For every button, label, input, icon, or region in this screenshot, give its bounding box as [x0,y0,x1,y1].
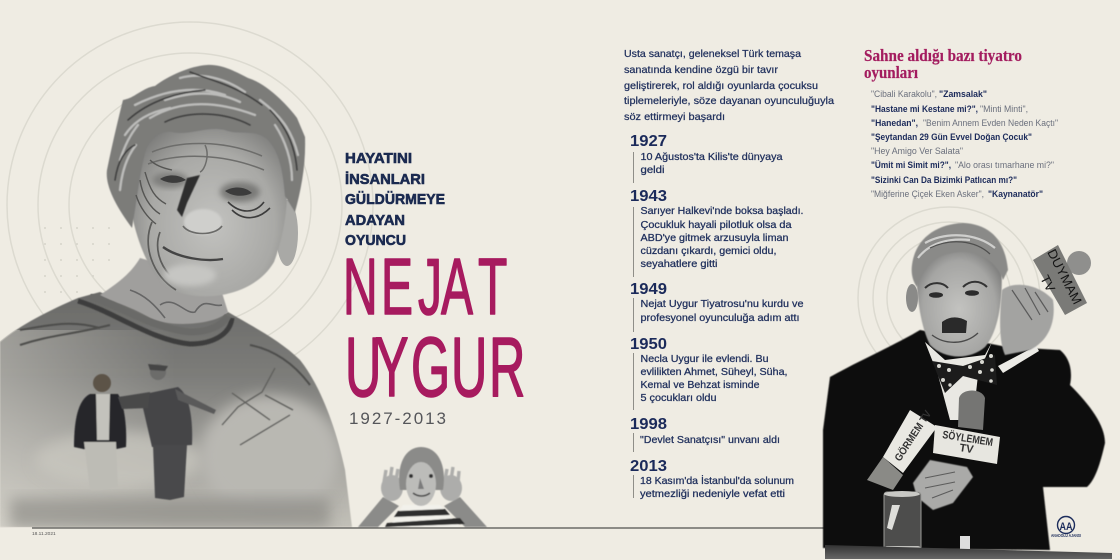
dot grid behind left portrait [44,227,110,293]
small photo: hands at ears [358,447,487,527]
collar [78,301,232,344]
timeline 2013: yetmezliği nedeniyle vefat etti [640,488,785,500]
heading: OYUNCU [345,233,406,249]
timeline 1943: Çocukluk hayali pilotluk olsa da [640,219,792,231]
wrinkles beside left eye [136,160,172,224]
Anadolu Agency logo: AA [1060,521,1073,533]
intro text: sanatında kendine özgü bir tavır [624,64,779,76]
timeline 1950: Necla Uygur ile evlendi. Bu [640,353,769,365]
eye sockets [152,172,188,188]
heading: İNSANLARI [345,171,425,188]
timeline 1949: 1949 [630,281,667,298]
cuff [998,346,1039,373]
microphone: SÖYLEMEM TV [933,390,1000,464]
theatre plays heading: oyunları [864,63,918,82]
face [917,245,1002,357]
theatre plays list: "Alo orası tımarhane mi?" [955,160,1054,171]
photo: Nejat Uygur with microphones [823,223,1112,559]
timeline 1998 [630,416,780,452]
eyes [160,175,186,183]
timeline 1998: "Devlet Sanatçısı" unvanı aldı [640,434,780,446]
timeline 1943: cüzdanı çıkardı, gemici oldu, [640,245,776,257]
hair [107,65,305,228]
heading: GÜLDÜRMEYE [345,191,445,208]
theatre plays list: "Hanedan", [871,118,918,129]
hair [399,447,444,490]
cheek lines and mouth [148,222,176,290]
intro text: Usta sanatçı, geleneksel Türk temaşa [624,48,801,60]
theatre plays list: "Sizinki Can Da Bizimki Patlıcan mı?" [871,175,1017,186]
name: UYGUR [345,320,525,414]
Anadolu Agency logo: ANADOLU AJANSI [1051,533,1081,538]
timeline 2013: 18 Kasım'da İstanbul'da solunum [640,474,794,487]
forehead wrinkles [148,143,264,172]
hair [912,223,1008,287]
microphone: GÖRMEM TV [867,408,937,490]
timeline 1927: 1927 [630,133,667,150]
hair strands [115,72,298,190]
theatre plays list: "Cibali Karakolu", [871,89,937,100]
decorative rings behind right figure [858,207,1040,389]
nose shadow [177,175,200,217]
timeline 1927: 10 Ağustos'ta Kilis'te dünyaya [640,151,783,163]
timeline 1950: evlilikten Ahmet, Süheyl, Süha, [640,366,788,378]
microphone: SÖYLEMEM TV: SÖYLEMEM [942,428,994,449]
theatre plays list: "Minti Minti", [980,104,1028,115]
arms [358,497,487,527]
timeline 1943: Sarıyer Halkevi'nde boksa başladı. [640,205,804,217]
timeline 2013: 2013 [630,458,667,475]
nose [184,209,222,235]
timeline 1943: seyahatlere gitti [640,258,718,270]
ear [906,284,918,312]
eyes and brows [925,282,987,288]
theatre plays list [871,89,1058,200]
intro text: geliştirerek, rol aldığı oyunlarda çocuksu [624,80,818,92]
theatre plays list: "Hey Amigo Ver Salata" [871,146,963,157]
theatre plays list: "Hastane mi Kestane mi?", [871,104,978,115]
timeline 1998: 1998 [630,416,667,433]
neck [100,258,228,324]
theatre plays list: "Benim Annem Evden Neden Kaçtı" [923,118,1058,129]
theatre plays list: "Miğferine Çiçek Eken Asker", [871,189,984,200]
ear [276,200,298,266]
intro text [624,48,834,123]
jacket [823,330,1105,550]
timeline 1927: geldi [640,164,664,176]
microphone: DUYMAM TV [1033,245,1091,315]
theatre plays heading [864,46,1022,82]
date stamp: 18.11.2021 [32,531,56,537]
timeline 1950: 5 çocukları oldu [640,392,717,404]
heading [345,151,445,249]
microphone: GÖRMEM TV: GÖRMEM TV [892,408,934,464]
heading: HAYATINI [345,151,412,167]
hand at ear [1000,285,1054,355]
shirt front [925,342,992,420]
timeline 1950: 1950 [630,336,667,353]
shirt tonal shading [0,324,352,528]
microphone: SÖYLEMEM TV: TV [959,442,975,456]
shirt print: two figures [74,364,216,500]
holding hand [913,460,973,510]
intro text: tiplemeleriyle, söze dayanan oyunculuğuyla [624,95,834,107]
life dates: 1927-2013 [349,409,446,428]
theatre plays list: "Zamsalak" [939,89,987,100]
microphone: DUYMAM TV: TV [1037,273,1058,294]
theatre plays list: "Ümit mi Simit mi?", [871,160,951,171]
timeline 1949 [630,281,804,332]
decorative rings behind left portrait [7,22,373,388]
face [132,116,287,296]
hands [381,475,403,501]
heading: ADAYAN [345,213,405,229]
timeline 1943: 1943 [630,188,667,205]
timeline 1927 [630,133,783,183]
microphone: DUYMAM TV: DUYMAM [1044,247,1085,307]
baseline rule [32,528,824,529]
timeline 1949: profesyonel oyunculuğa adım attı [640,312,800,324]
timeline 1950: Kemal ve Behzat isminde [640,379,760,391]
water glass [884,491,921,552]
name: NEJAT [343,241,507,331]
timeline 2013 [630,458,794,500]
timeline 1949: Nejat Uygur Tiyatrosu'nu kurdu ve [640,298,804,310]
nose and moustache [942,317,967,333]
timeline 1950 [630,336,788,410]
theatre plays list: "Şeytandan 29 Gün Evvel Doğan Çocuk" [871,132,1032,143]
timeline [630,133,804,500]
timeline 1943 [630,188,804,277]
portrait: elderly Nejat Uygur [0,65,352,528]
striped shirt [390,505,460,527]
Anadolu Agency logo [1051,516,1081,538]
intro text: söz ettirmeyi başardı [624,111,725,123]
name [343,241,525,414]
theatre plays list: "Kaynanatör" [988,189,1043,200]
shirt [0,292,352,527]
table [825,545,1112,559]
theatre plays heading: Sahne aldığı bazı tiyatro [864,46,1022,65]
timeline 1943: ABD'ye gitmek arzusuyla liman [640,232,789,244]
bow tie [932,355,997,393]
face [406,462,436,506]
